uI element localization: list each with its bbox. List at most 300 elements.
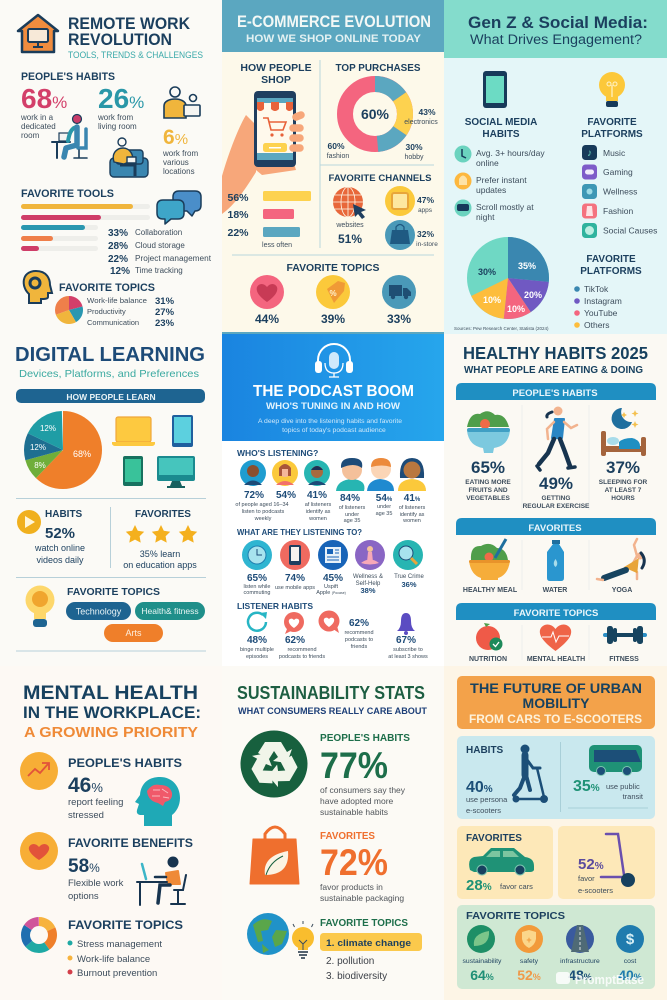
stat: 77 percent: of consumers say they bbox=[320, 785, 406, 795]
header: A deep dive into the listening habits and favorite bbox=[258, 418, 402, 425]
panel: healthy habits 2025 bbox=[444, 334, 667, 666]
title: IN THE WORKPLACE: bbox=[23, 704, 201, 722]
header: topics of today's podcast audience bbox=[282, 427, 386, 434]
panel: habits: transit bbox=[623, 792, 644, 801]
legend: YouTube bbox=[584, 308, 618, 318]
stat: 6 percent: work from bbox=[162, 149, 198, 158]
topic list bbox=[68, 918, 183, 979]
icon row: mobility topics bbox=[467, 925, 644, 953]
habit: night scrolling: Scroll mostly at bbox=[476, 202, 534, 212]
icon row: mobility topics: + bbox=[526, 935, 532, 945]
pie labels: 35% bbox=[518, 261, 536, 271]
stats: listening topics: commuting bbox=[244, 590, 270, 596]
band: how people learn bbox=[16, 389, 205, 403]
donut chart: topics bbox=[26, 922, 52, 948]
list: topic percentages: 31% bbox=[155, 296, 175, 307]
legend bbox=[574, 284, 622, 330]
donut labels: electronics bbox=[404, 119, 438, 126]
topic stats: 64% bbox=[470, 967, 494, 983]
list: tool percentages: 33% bbox=[108, 228, 128, 239]
band: how people learn: HOW PEOPLE LEARN bbox=[66, 392, 156, 402]
title: WHAT CONSUMERS REALLY CARE ABOUT bbox=[238, 706, 427, 717]
stats: listener habits: binge multiple bbox=[240, 647, 274, 653]
stat: habits: 52% bbox=[45, 525, 75, 542]
avatars: large bbox=[336, 458, 426, 491]
pill: technology: Technology bbox=[76, 606, 122, 616]
stats: large avatars: of listeners bbox=[339, 505, 366, 511]
icon: hand holding phone bbox=[222, 91, 301, 214]
label: in-store: 32% bbox=[417, 229, 434, 239]
platform list: Gaming bbox=[603, 167, 633, 177]
stats: listening topics: Wellness & bbox=[353, 574, 383, 580]
stats: large avatars: age 35 bbox=[376, 511, 392, 517]
stat: stressed: PEOPLE'S HABITS bbox=[68, 756, 182, 770]
stats: listener habits: recommend bbox=[344, 630, 374, 636]
icon: person with laptop bbox=[164, 87, 200, 118]
stat: 68 percent: work in a bbox=[20, 113, 54, 122]
stats: round avatars: 54% bbox=[276, 490, 296, 501]
bar chart: tools bbox=[21, 204, 150, 251]
list: topic percentages: 27% bbox=[155, 307, 175, 318]
icon row: listener habits bbox=[248, 610, 415, 635]
heading: social media habits: HABITS bbox=[482, 129, 520, 140]
pill: health and fitness bbox=[135, 602, 205, 620]
stat: 49 percent bbox=[523, 474, 590, 510]
panel: habits: HABITS bbox=[466, 745, 504, 756]
topic ranking: 3. biodiversity bbox=[326, 971, 387, 982]
stat: flexible work bbox=[68, 836, 193, 902]
legend: Instagram bbox=[584, 296, 622, 306]
heading: listener habits: LISTENER HABITS bbox=[237, 601, 313, 611]
donut labels: 60% bbox=[327, 141, 345, 151]
stats: large avatars: under bbox=[377, 504, 391, 510]
heading: favorite platforms: FAVORITE bbox=[587, 117, 637, 128]
header: WHO'S TUNING IN AND HOW bbox=[266, 401, 400, 412]
stat: 37 percent: 37% bbox=[606, 458, 640, 477]
heading: who's listening: WHO'S LISTENING? bbox=[237, 448, 318, 458]
stat: favorites: 35% learn bbox=[140, 549, 180, 559]
stat: 72 percent: FAVORITES bbox=[320, 830, 375, 842]
stat: 49 percent: 49% bbox=[539, 474, 573, 493]
topics labels: MENTAL HEALTH bbox=[527, 656, 585, 663]
favorites labels bbox=[463, 587, 632, 594]
stat: 37 percent: HOURS bbox=[611, 495, 635, 502]
bar chart: shopping frequency: 56% bbox=[227, 192, 249, 204]
icon row: listening topics bbox=[242, 540, 423, 570]
stats: listener habits: podcasts to bbox=[345, 637, 373, 643]
header bbox=[222, 0, 444, 52]
pie labels: 10% bbox=[483, 295, 501, 305]
heading: favorite platforms bbox=[581, 117, 643, 140]
pie labels: 10% bbox=[507, 304, 525, 314]
stats: round avatars: af listeners bbox=[305, 502, 332, 508]
label: apps: apps bbox=[418, 207, 433, 214]
pill: arts bbox=[104, 624, 163, 642]
heading: social media habits: SOCIAL MEDIA bbox=[465, 117, 537, 128]
stat: flexible work: 58% bbox=[68, 856, 100, 877]
panel: sustainability stats bbox=[222, 666, 444, 1000]
icon: apple bbox=[476, 623, 502, 650]
topic ranking: 2. pollution bbox=[326, 956, 374, 967]
stat: favorites bbox=[123, 509, 197, 570]
stats: listening topics: Uspift bbox=[324, 584, 338, 590]
title: MENTAL HEALTH bbox=[23, 682, 198, 704]
panel: favorites scooter bbox=[558, 826, 655, 899]
stats: round avatars: of people aged 16–34 bbox=[235, 502, 289, 508]
stats: listening topics: 36% bbox=[401, 580, 417, 589]
panel: digital learning bbox=[0, 334, 222, 666]
stats: large avatars: of listeners bbox=[399, 505, 426, 511]
heading: favorite platforms legend: FAVORITE bbox=[586, 254, 636, 265]
stat: 6 percent: locations bbox=[163, 167, 195, 176]
stat: 49 percent: GETTING bbox=[542, 495, 570, 502]
heading: favorite platforms: PLATFORMS bbox=[581, 129, 643, 140]
heading: how people shop bbox=[240, 62, 312, 86]
heading: favorite topics: FAVORITE TOPICS bbox=[59, 282, 155, 294]
heading: what are they listening to: WHAT ARE THEY LISTENING TO? bbox=[237, 527, 362, 537]
panel: favorite topics: FAVORITE TOPICS bbox=[466, 911, 565, 922]
pill: health and fitness: Health& fitness bbox=[141, 606, 199, 616]
label: websites: 51% bbox=[338, 232, 362, 246]
stats: large avatars bbox=[339, 493, 426, 524]
stat: stressed: stressed bbox=[68, 810, 104, 821]
topic percentages: 33% bbox=[387, 312, 411, 326]
stats: round avatars: listen to podcasts bbox=[242, 509, 284, 515]
stats: large avatars: identify as bbox=[400, 512, 425, 518]
stats: large avatars: women bbox=[402, 518, 421, 524]
stat: 6 percent: 6% bbox=[163, 126, 188, 149]
stat: 65 percent: VEGETABLES bbox=[466, 495, 510, 502]
stats: round avatars bbox=[235, 490, 332, 522]
topic percentages: 44% bbox=[255, 312, 279, 326]
panel: favorites car: FAVORITES bbox=[466, 833, 522, 844]
habit: instant updates: Prefer instant bbox=[476, 175, 527, 185]
title: A GROWING PRIORITY bbox=[24, 725, 198, 741]
icon: kick scooter bbox=[601, 834, 635, 887]
header: THE PODCAST BOOM bbox=[253, 383, 414, 400]
band: favorite topics bbox=[456, 603, 656, 620]
icon: tablet blue bbox=[172, 415, 193, 447]
stats: listening topics: use mobile apps bbox=[275, 585, 315, 591]
stat: 77 percent: have adopted more bbox=[320, 796, 394, 806]
pie labels: 8% bbox=[34, 461, 46, 470]
label: websites: websites bbox=[335, 222, 364, 229]
list: tool percentages: Collaboration bbox=[135, 228, 182, 237]
stat: 37 percent: AT LEAST 7 bbox=[605, 487, 642, 494]
stat: 26 percent bbox=[97, 83, 144, 131]
icon: brain lightbulb bbox=[26, 586, 54, 627]
icon: lightbulb bbox=[599, 72, 625, 107]
stats: round avatars: weekly bbox=[254, 516, 272, 522]
title bbox=[463, 343, 648, 376]
donut chart: top purchases bbox=[345, 84, 405, 144]
panel: habits bbox=[457, 736, 655, 819]
heading: how people shop: SHOP bbox=[261, 74, 291, 86]
icon: runner bbox=[537, 406, 577, 470]
bar chart: shopping frequency: 18% bbox=[227, 209, 249, 221]
stats: large avatars: under bbox=[345, 512, 359, 518]
icon: person at desk bbox=[52, 114, 87, 158]
stat: 68 percent bbox=[20, 83, 67, 140]
watermark: PromptBase bbox=[575, 972, 644, 987]
icon: house with monitor bbox=[18, 15, 58, 52]
title: SUSTAINABILITY STATS bbox=[237, 683, 425, 703]
stat: 49 percent: REGULAR EXERCISE bbox=[523, 503, 590, 510]
list: tool percentages: Project management bbox=[135, 254, 212, 263]
icon: shopping bag with leaf bbox=[250, 827, 299, 884]
stat: favorites: FAVORITES bbox=[135, 509, 191, 520]
stats: large avatars: age 35 bbox=[344, 518, 360, 524]
heading: favorite topics: FAVORITE TOPICS bbox=[67, 587, 160, 598]
pill: arts: Arts bbox=[125, 628, 142, 638]
legend: TikTok bbox=[584, 284, 609, 294]
stat: 26 percent: 26% bbox=[98, 83, 144, 114]
donut labels: hobby bbox=[404, 154, 424, 161]
heading: favorite tools: FAVORITE TOOLS bbox=[21, 188, 114, 200]
panel: favorites car: favor cars bbox=[500, 882, 533, 891]
list: topic percentages bbox=[87, 296, 175, 329]
platform list: Music bbox=[603, 148, 626, 158]
panel: habits: e-scooters bbox=[466, 806, 501, 815]
icon: apps tablet bbox=[385, 186, 415, 216]
topic list: FAVORITE TOPICS bbox=[68, 918, 183, 932]
stat: 72 percent: 72% bbox=[320, 842, 388, 883]
band: favorites: FAVORITES bbox=[528, 523, 582, 534]
donut labels bbox=[327, 106, 438, 161]
panel: the podcast boom bbox=[222, 334, 444, 666]
icon: person on sofa bbox=[110, 138, 148, 177]
stats: round avatars: women bbox=[308, 516, 327, 522]
title: DIGITAL LEARNING bbox=[15, 344, 205, 366]
stats: listener habits: at least 3 shows bbox=[388, 654, 428, 660]
stat: flexible work: Flexible work bbox=[68, 878, 124, 889]
platform list: Fashion bbox=[603, 206, 634, 216]
title: REMOTE WORK bbox=[68, 14, 191, 33]
stat: stressed bbox=[68, 756, 182, 821]
icon: globe bbox=[247, 913, 289, 955]
stat: 65 percent: FRUITS AND bbox=[468, 487, 508, 494]
title: HEALTHY HABITS 2025 bbox=[463, 343, 648, 363]
stats: listening topics: Self-Help bbox=[356, 581, 381, 587]
panel: favorites scooter: 52% bbox=[578, 856, 604, 873]
favorites labels: YOGA bbox=[612, 587, 632, 594]
panel: remote work revolution bbox=[0, 0, 222, 334]
topic list: Burnout prevention bbox=[77, 968, 157, 979]
stat: stressed: 46% bbox=[68, 774, 103, 797]
title box bbox=[457, 676, 655, 729]
stats: round avatars: identify as bbox=[306, 509, 331, 515]
topics labels: NUTRITION bbox=[469, 656, 507, 663]
header bbox=[222, 334, 444, 441]
heading: favorite channels: FAVORITE CHANNELS bbox=[328, 173, 432, 184]
pie labels bbox=[30, 424, 91, 470]
icon: delivery truck bbox=[382, 275, 416, 309]
panel: habits: use persona bbox=[466, 795, 508, 804]
title: WHAT PEOPLE ARE EATING & DOING bbox=[464, 365, 643, 376]
pie chart: how people learn bbox=[44, 430, 82, 470]
panel: habits: use public bbox=[606, 782, 640, 791]
icon: price tag bbox=[316, 275, 350, 309]
habit: night scrolling: night bbox=[476, 212, 495, 222]
icon: head with brain bbox=[135, 777, 180, 826]
stat: 6 percent bbox=[162, 126, 198, 176]
stats: listener habits bbox=[240, 618, 428, 660]
stat: 26 percent: work from bbox=[97, 113, 133, 122]
stat: 26 percent: living room bbox=[98, 122, 137, 131]
header: E-COMMERCE EVOLUTION bbox=[237, 12, 431, 31]
title: REVOLUTION bbox=[68, 30, 172, 49]
legend: Others bbox=[584, 320, 610, 330]
icon: globe with cursor bbox=[333, 187, 366, 219]
list: tool percentages: 12% bbox=[110, 266, 130, 277]
list: tool percentages: Cloud storage bbox=[135, 241, 185, 250]
pie labels bbox=[478, 261, 542, 314]
title: Devices, Platforms, and Preferences bbox=[19, 368, 199, 380]
title bbox=[15, 344, 205, 380]
icon: salad bowl bbox=[467, 411, 510, 453]
list: tool percentages bbox=[108, 228, 212, 277]
title bbox=[237, 683, 427, 717]
topic stats: infrastructure bbox=[560, 958, 600, 965]
pie labels: 12% bbox=[40, 424, 56, 433]
topic stats bbox=[463, 958, 642, 983]
stats: large avatars: 54% bbox=[376, 493, 393, 504]
icon: heart rate bbox=[540, 625, 571, 651]
stat: 68 percent: dedicated bbox=[21, 122, 56, 131]
icon: headphones and microphone bbox=[315, 344, 353, 377]
habit: hours online: Avg. 3+ hours/day bbox=[476, 148, 545, 158]
title bbox=[68, 14, 203, 61]
topics labels bbox=[469, 656, 639, 663]
stats: listening topics: 74% bbox=[285, 573, 305, 584]
topic stats: safety bbox=[520, 958, 539, 965]
heading: people's habits: PEOPLE'S HABITS bbox=[21, 71, 115, 83]
stat: habits bbox=[34, 509, 85, 565]
topic ranking: 1. climate change bbox=[326, 938, 411, 949]
icon: person at workstation bbox=[137, 856, 186, 905]
heading: how people shop: HOW PEOPLE bbox=[240, 62, 312, 74]
stats: listener habits: 62% bbox=[349, 618, 369, 629]
pie labels: 12% bbox=[30, 443, 46, 452]
donut labels: 30% bbox=[405, 142, 423, 152]
topic stats: sustainability bbox=[463, 958, 502, 965]
favorites labels: WATER bbox=[543, 587, 567, 594]
icon: recycle symbol bbox=[240, 730, 308, 798]
icon: tablet green bbox=[123, 456, 143, 486]
icon: trend arrow bbox=[20, 752, 58, 790]
panel: favorites car: 28% bbox=[466, 877, 492, 894]
stat: 72 percent: favor products in bbox=[320, 882, 383, 892]
topic ranking: FAVORITE TOPICS bbox=[320, 917, 408, 929]
panel: mental health in the workplace bbox=[0, 666, 222, 1000]
stats: listening topics: listen while bbox=[244, 584, 270, 590]
icon: laptop bbox=[112, 417, 155, 446]
pie chart: platforms bbox=[488, 258, 528, 298]
title box: MOBILITY bbox=[523, 695, 590, 711]
stat: habits: watch online bbox=[34, 543, 85, 553]
panel: future of urban mobility bbox=[444, 666, 667, 1000]
stats: listening topics bbox=[244, 573, 425, 596]
icon: shopping bag bbox=[385, 220, 415, 250]
stat: 72 percent bbox=[320, 830, 404, 903]
icon: head with gear bbox=[24, 271, 52, 303]
habit: hours online bbox=[454, 146, 545, 168]
heading: favorite topics: FAVORITE TOPICS bbox=[286, 262, 380, 274]
icon: water bottle bbox=[547, 540, 564, 581]
stats: round avatars: 72% bbox=[244, 490, 264, 501]
icon: rider on scooter bbox=[513, 744, 548, 802]
topic stats: cost bbox=[624, 958, 636, 965]
stats: listening topics: Apple (Pocase) bbox=[316, 590, 346, 596]
platform list: ♪ bbox=[587, 148, 592, 159]
stats: listener habits: 48% bbox=[247, 635, 267, 646]
stats: round avatars: 41% bbox=[307, 490, 327, 501]
pie labels: 68% bbox=[73, 449, 91, 459]
panel: gen z and social media bbox=[444, 0, 667, 334]
list: topic percentages: 23% bbox=[155, 318, 175, 329]
topic ranking bbox=[320, 917, 422, 982]
stats: listening topics: 45% bbox=[323, 573, 343, 584]
stat: stressed: report feeling bbox=[68, 797, 123, 808]
heading: social media habits bbox=[465, 117, 537, 140]
stat: favorites: on education apps bbox=[123, 560, 197, 570]
stat: 65 percent bbox=[465, 458, 511, 502]
stat: 37 percent bbox=[599, 458, 647, 502]
icon: bus bbox=[589, 745, 642, 776]
stats: listening topics: True Crime bbox=[394, 574, 425, 580]
panel: e-commerce evolution bbox=[222, 0, 444, 334]
stats: listener habits: subscribe to bbox=[393, 647, 423, 653]
icon: play button bbox=[17, 510, 41, 534]
list: tool percentages: Time tracking bbox=[135, 266, 183, 275]
stat: flexible work: FAVORITE BENEFITS bbox=[68, 836, 193, 850]
platform list: Wellness bbox=[603, 186, 637, 196]
header: HOW WE SHOP ONLINE TODAY bbox=[246, 33, 422, 45]
topic list: Stress management bbox=[77, 939, 162, 950]
topic stats: 48% bbox=[568, 967, 592, 983]
icon: dumbbell bbox=[603, 626, 647, 644]
icon: heart bbox=[250, 275, 284, 309]
favorites labels: HEALTHY MEAL bbox=[463, 587, 518, 594]
title bbox=[23, 682, 201, 741]
topic percentages bbox=[255, 312, 411, 326]
habit: instant updates bbox=[454, 172, 527, 195]
list: topic percentages: Work-life balance bbox=[87, 296, 147, 305]
platform list: Social Causes bbox=[603, 226, 657, 236]
panel: favorites car bbox=[457, 826, 553, 899]
donut labels: fashion bbox=[327, 153, 349, 160]
title box: THE FUTURE OF URBAN bbox=[470, 680, 642, 696]
habit: night scrolling bbox=[454, 200, 534, 222]
label: in-store bbox=[416, 229, 438, 248]
icon: phone bbox=[483, 71, 507, 108]
stats: listener habits: episodes bbox=[246, 654, 268, 660]
panel: favorite topics bbox=[457, 905, 655, 989]
panel: habits: 40% bbox=[466, 779, 493, 796]
stats: listening topics: 38% bbox=[360, 586, 376, 595]
heading: top purchases: TOP PURCHASES bbox=[336, 62, 420, 74]
stats: listening topics: 65% bbox=[247, 573, 267, 584]
list: topic percentages: Communication bbox=[87, 318, 139, 327]
stat: habits: HABITS bbox=[45, 509, 83, 520]
panel: favorites scooter: favor bbox=[578, 874, 595, 883]
stat: 65 percent: 65% bbox=[471, 458, 505, 477]
habit: hours online: online bbox=[476, 158, 499, 168]
stats: listener habits: 67% bbox=[396, 635, 416, 646]
icon: monitor bbox=[157, 456, 195, 488]
stat: 68 percent: 68% bbox=[21, 83, 67, 114]
topic percentages: 39% bbox=[321, 312, 345, 326]
